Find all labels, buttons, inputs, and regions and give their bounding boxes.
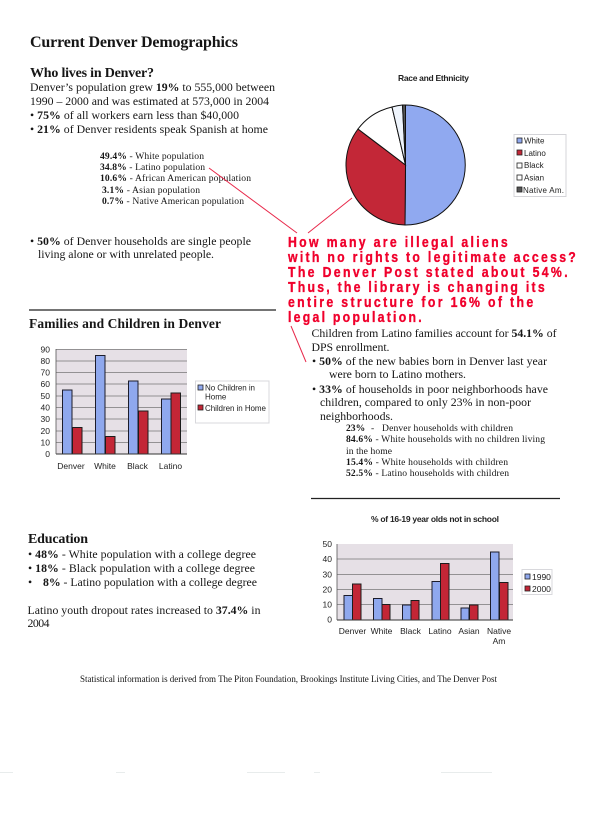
text block: single households: living alone or with unrelated people. — [38, 247, 214, 261]
y axis labels: 40 — [41, 402, 50, 412]
pie chart: race and ethnicity — [346, 73, 566, 225]
arrow: babies line — [291, 326, 306, 362]
text block: children and households: 23% — [346, 423, 365, 434]
callout: red annotation: The Denver Post stated about 54%. — [288, 264, 568, 280]
callout: red annotation: entire structure for 16% of the — [288, 294, 534, 310]
heading: families and children: Families and Children in Denver — [29, 316, 221, 331]
text block: population summary: • 75% of all workers earn less than $40,000 — [30, 108, 239, 122]
text block: single households — [30, 234, 251, 261]
y axis labels: 80 — [41, 356, 50, 366]
text block: college degrees: • 48% - White population with a college degree — [28, 547, 256, 561]
text block: children and households: in the home — [346, 446, 392, 457]
arrow: pie slice line — [308, 198, 352, 233]
callout: red annotation: legal population. — [288, 309, 422, 325]
x axis labels — [57, 461, 182, 471]
x axis labels: Denver — [339, 626, 366, 636]
y axis labels: 40 — [323, 554, 332, 564]
text block: children and households: • 50% of the new babies born in Denver last year — [312, 354, 547, 368]
pie legend: Latino — [524, 149, 546, 158]
callout: red annotation: How many are illegal aliens — [288, 234, 508, 250]
legend: 2000 — [532, 584, 551, 594]
text block: college degrees: • — [28, 575, 32, 589]
y axis labels: 60 — [41, 379, 50, 389]
text block: population summary: • 21% of Denver residents speak Spanish at home — [30, 122, 268, 136]
text block: children and households: Denver households with children — [382, 423, 513, 434]
y axis labels: 10 — [41, 438, 50, 448]
text block: children and households: 15.4% - White households with children — [346, 457, 508, 468]
bar chart: households with and without children — [41, 344, 269, 471]
text block: children and households: were born to Latino mothers. — [329, 367, 466, 381]
y axis labels: 70 — [41, 368, 50, 378]
text block: children and households: children, compared to only 23% in non-poor — [320, 395, 531, 409]
callout: red annotation: with no rights to legitimate access? — [287, 249, 576, 265]
x axis labels: Native — [487, 626, 511, 636]
legend: No Children in — [205, 384, 255, 392]
y axis labels: 30 — [323, 570, 332, 580]
y axis labels: 30 — [41, 414, 50, 424]
y axis labels: 20 — [41, 426, 50, 436]
x axis labels: White — [94, 461, 116, 471]
text block: children and households: 84.6% - White households with no children living — [346, 434, 545, 445]
heading: education: Education — [28, 532, 88, 547]
y axis labels: 50 — [323, 539, 332, 549]
text block: population summary: 1990 – 2000 and was estimated at 573,000 in 2004 — [30, 94, 269, 108]
x axis labels: Asian — [458, 626, 480, 636]
arrow: latino population line — [209, 168, 297, 233]
legend — [522, 570, 552, 594]
x axis labels: White — [371, 626, 393, 636]
pie legend: Black — [524, 161, 545, 170]
pie legend — [514, 134, 566, 196]
x axis labels: Am — [493, 636, 505, 646]
bars — [62, 356, 180, 454]
bars — [344, 552, 508, 620]
text block: college degrees: • 18% - Black population with a college degree — [28, 561, 255, 575]
text block: population summary: Denver’s population grew 19% to 555,000 between — [30, 80, 275, 94]
text block: dropout rates: Latino youth dropout rates increased to 37.4% in — [28, 603, 261, 617]
y axis labels: 10 — [323, 600, 332, 610]
text block: children and households: neighborhoods. — [320, 409, 393, 423]
y axis labels — [41, 344, 50, 459]
y axis labels: 0 — [45, 449, 50, 459]
text block: population percentages: 0.7% - Native American population — [102, 196, 244, 207]
pie legend: Asian — [524, 174, 544, 182]
x axis labels: Latino — [428, 626, 452, 636]
pie legend: Native Am. — [523, 186, 564, 195]
legend — [196, 381, 269, 423]
text block: children and households: Children from Latino families account for 54.1% of — [312, 326, 557, 340]
text block: children and households: • 33% of households in poor neighborhoods have — [312, 382, 548, 396]
text block: children and households — [312, 326, 557, 479]
text block: population percentages: 34.8% - Latino population — [100, 162, 205, 173]
x axis labels: Black — [400, 626, 422, 636]
text block: population percentages — [100, 151, 251, 207]
heading: who lives in Denver: Who lives in Denver? — [30, 66, 154, 81]
y axis labels: 50 — [41, 391, 50, 401]
text block: college degrees — [28, 547, 257, 589]
pie slices — [346, 105, 465, 225]
text block: population percentages: 3.1% - Asian population — [102, 185, 200, 196]
chart title: % of 16-19 year olds not in school — [371, 514, 499, 524]
text block: children and households: - — [371, 423, 374, 434]
section: who lives in Denver — [30, 66, 275, 136]
title: Current Denver Demographics — [30, 34, 238, 51]
text block: college degrees: 8% - Latino population with a college degree — [43, 575, 257, 589]
x axis labels: Black — [127, 461, 149, 471]
y axis labels — [323, 539, 332, 624]
text block: single households: • 50% of Denver households are single people — [30, 234, 251, 248]
bar chart: 16-19 year olds not in school — [323, 514, 552, 646]
text block: population percentages: 10.6% - African American population — [100, 173, 251, 184]
plot area — [337, 544, 513, 620]
legend: Children in Home — [205, 404, 267, 413]
legend: 1990 — [532, 572, 551, 582]
text block: dropout rates: 2004 — [28, 616, 50, 630]
x axis labels — [339, 626, 511, 646]
x axis labels: Latino — [159, 461, 182, 471]
callout: red annotation — [287, 234, 576, 325]
text block: children and households: DPS enrollment. — [312, 340, 390, 354]
text block: population summary — [30, 80, 275, 136]
y axis labels: 0 — [327, 614, 332, 624]
legend: Home — [205, 392, 227, 402]
text block: population percentages: 49.4% - White population — [100, 151, 204, 162]
pie legend: White — [524, 136, 545, 146]
footer: sources: Statistical information is derived from The Piton Foundation, Brookings Institute Living Cities, and The Denver Post — [80, 674, 497, 684]
chart title: Race and Ethnicity — [398, 73, 469, 83]
plot area — [56, 349, 187, 454]
text block: children and households: 52.5% - Latino households with children — [346, 468, 509, 479]
y axis labels: 90 — [41, 344, 50, 354]
text block: dropout rates — [28, 603, 261, 630]
callout: red annotation: Thus, the library is changing its — [288, 279, 545, 295]
x axis labels: Denver — [57, 461, 85, 471]
section: education — [28, 532, 261, 630]
y axis labels: 20 — [323, 584, 332, 594]
